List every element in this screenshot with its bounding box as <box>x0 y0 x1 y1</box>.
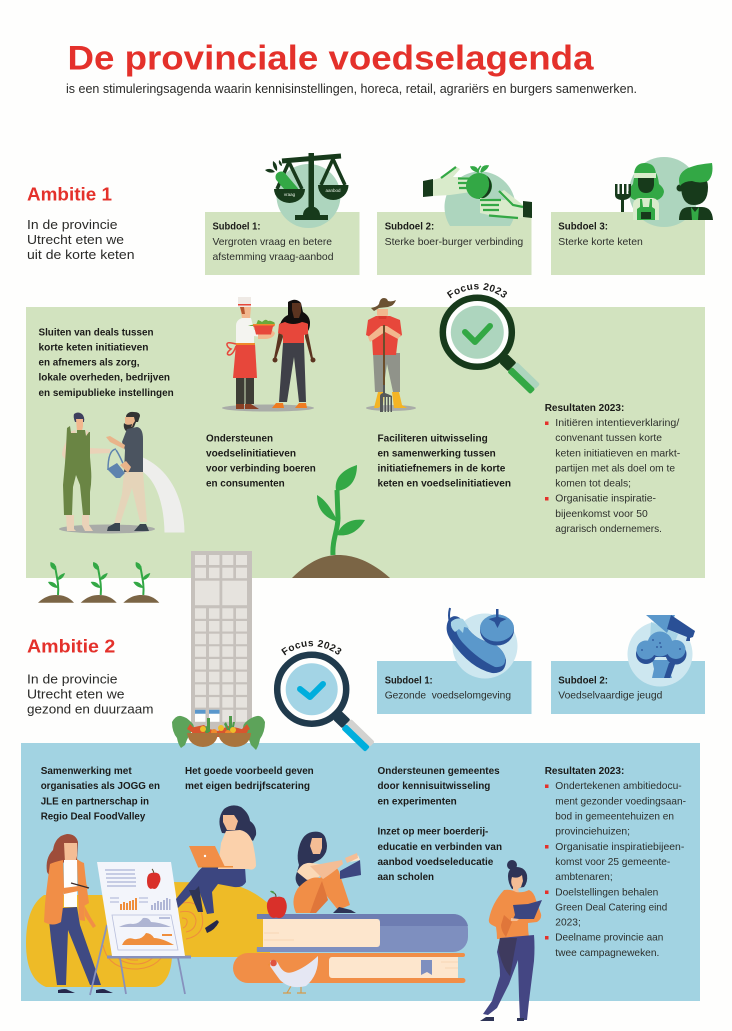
panel: ambitie 2 main <box>21 743 700 1001</box>
illustration: white path <box>143 458 184 532</box>
text: samenwerking <box>41 766 160 822</box>
icon: farmers <box>615 157 713 227</box>
illustration: vegetable baskets <box>172 716 265 750</box>
text: samenwerking: Samenwerking met <box>41 766 132 777</box>
illustration: woman reading <box>293 832 361 913</box>
text: ondersteunen voedselinitiatieven: voor verbinding boeren <box>206 464 316 474</box>
illustration: chicken <box>268 956 318 993</box>
text: sluiten van deals: en afnemers als zorg, <box>38 358 140 368</box>
text: samenwerking: organisaties als JOGG en <box>41 781 160 792</box>
icon: scales <box>265 153 348 228</box>
subdoel box blue 1 <box>377 661 532 714</box>
illustration: presenting woman <box>44 834 113 993</box>
text: faciliteren uitwisseling: initiatiefnemers in de korte <box>378 464 506 474</box>
results ambitie 2 <box>545 766 686 959</box>
subdoel box blue 1: Gezonde voedselomgeving <box>385 690 511 702</box>
illustration: standing woman with book <box>480 860 542 1021</box>
focus magnifier blue: Focus 2023 <box>281 640 342 656</box>
ambitie 1 heading: Ambitie 1 <box>27 184 112 204</box>
text: ondersteunen gemeentes: en experimenten <box>378 796 457 807</box>
text: sluiten van deals: lokale overheden, bedrijven <box>38 373 170 384</box>
focus magnifier green: Focus 2023 <box>446 283 507 298</box>
subdoel box blue 2 <box>551 661 705 714</box>
subdoel box 1: afstemming vraag-aanbod <box>212 252 334 263</box>
illustration: presentation board <box>90 862 191 995</box>
text: ondersteunen gemeentes: door kennisuitwisseling <box>378 781 490 792</box>
illustration: apple on books <box>267 891 287 918</box>
illustration: seedling 2 <box>81 562 117 603</box>
text: het goede voorbeeld <box>185 766 314 792</box>
focus magnifier blue <box>274 640 374 752</box>
ambitie 1 text <box>27 218 135 262</box>
text: ondersteunen voedselinitiatieven: Ondersteunen <box>206 433 273 444</box>
text: ondersteunen gemeentes: aan scholen <box>378 872 434 883</box>
ambitie 2 text: gezond en duurzaam <box>27 702 154 716</box>
text: het goede voorbeeld: Het goede voorbeeld geven <box>185 766 314 777</box>
icon: scales: vraag <box>284 192 296 197</box>
ambitie 2 heading: Ambitie 2 <box>27 636 115 657</box>
text: sluiten van deals: en semipublieke instellingen <box>38 388 174 399</box>
icon: hands with apple <box>423 166 532 226</box>
results ambitie 2: bod in gemeentehuizen en <box>555 811 674 822</box>
results ambitie 1: agrarisch ondernemers. <box>555 524 662 535</box>
text: ondersteunen voedselinitiatieven: voedselinitiatieven <box>206 448 296 459</box>
results ambitie 1: Resultaten 2023: <box>545 403 624 414</box>
ambitie 1 text: Utrecht eten we <box>27 233 124 247</box>
text: ondersteunen voedselinitiatieven: en consumenten <box>206 479 285 490</box>
ambitie 1 text: In de provincie <box>27 218 118 232</box>
illustration: farmer <box>366 298 416 412</box>
subdoel box blue 2: Subdoel 2: <box>558 675 608 686</box>
text: faciliteren uitwisseling: keten en voedselinitiatieven <box>378 479 511 490</box>
focus magnifier green <box>440 283 540 394</box>
icon: broccoli with graduation cap <box>628 615 695 686</box>
panel: ambitie 1 main <box>26 307 705 578</box>
results ambitie 1: komen tot deals; <box>555 479 631 490</box>
text: sluiten van deals: korte keten initiatieven <box>38 342 148 353</box>
icon: scales: aanbod <box>325 188 341 193</box>
subdoel box 2: Subdoel 2: <box>385 222 434 232</box>
illustration: seedling 3 <box>123 562 159 603</box>
subdoel box 3: Subdoel 3: <box>558 222 608 232</box>
subdoel box 2 <box>377 212 532 275</box>
text: sluiten van deals <box>38 327 174 399</box>
results ambitie 1: Initiëren intentieverklaring/ <box>555 418 679 429</box>
subdoel box 1: Subdoel 1: <box>212 222 260 232</box>
results ambitie 1: convenant tussen korte <box>555 433 662 444</box>
results ambitie 2: Ondertekenen ambitiedocu- <box>555 781 682 792</box>
illustration: books <box>233 914 468 983</box>
results ambitie 2: ambtenaren; <box>555 872 613 883</box>
results ambitie 2: Resultaten 2023: <box>545 766 624 777</box>
text: samenwerking: Regio Deal FoodValley <box>41 811 146 822</box>
text: ondersteunen gemeentes: aanbod voedseleducatie <box>378 857 494 868</box>
ambitie 2 text: In de provincie <box>27 672 118 686</box>
illustration: hay bales <box>26 882 270 987</box>
results ambitie 2: komst voor 25 gemeente- <box>555 857 670 868</box>
icon: eggplant and tomato <box>447 608 518 678</box>
title: De provinciale voedselagenda <box>68 40 595 78</box>
illustration: couple with bag <box>59 412 155 534</box>
text: faciliteren uitwisseling: Faciliteren uitwisseling <box>378 433 488 444</box>
text: ondersteunen gemeentes: Ondersteunen gemeentes <box>378 766 500 777</box>
subdoel box blue 2: Voedselvaardige jeugd <box>558 690 663 702</box>
results ambitie 1: partijen met als doel om te <box>555 464 675 474</box>
subdoel box blue 1: Subdoel 1: <box>385 675 433 686</box>
results ambitie 2: 2023; <box>555 918 581 928</box>
illustration: big plant <box>292 465 390 578</box>
text: het goede voorbeeld: met eigen bedrijfscatering <box>185 781 310 792</box>
results ambitie 2: twee campagneweken. <box>555 948 659 959</box>
text: samenwerking: JLE en partnerschap in <box>41 796 149 807</box>
text: faciliteren uitwisseling <box>378 433 511 490</box>
subdoel box 1 <box>205 212 360 275</box>
text: ondersteunen gemeentes: educatie en verbinden van <box>378 842 502 853</box>
illustration: chef and woman <box>222 297 316 412</box>
illustration: seedling 1 <box>38 562 74 603</box>
ambitie 2 text <box>27 672 154 716</box>
results ambitie 2: Deelname provincie aan <box>555 933 663 944</box>
results ambitie 1 <box>545 403 680 535</box>
text: ondersteunen gemeentes: Inzet op meer boerderij- <box>378 827 488 838</box>
results ambitie 2: provinciehuizen; <box>555 827 630 838</box>
illustration: building <box>191 551 252 731</box>
text: sluiten van deals: Sluiten van deals tussen <box>38 327 154 338</box>
subdoel box 2: Sterke boer-burger verbinding <box>385 237 524 248</box>
subdoel box 1: Vergroten vraag en betere <box>212 237 332 248</box>
results ambitie 2: ment gezonder voedingsaan- <box>555 796 686 807</box>
illustration: woman with laptop <box>176 805 256 933</box>
results ambitie 2: Green Deal Catering eind <box>555 902 668 913</box>
results ambitie 1: bijeenkomst voor 50 <box>555 509 648 520</box>
text: faciliteren uitwisseling: en samenwerking tussen <box>378 448 496 459</box>
subdoel box 3 <box>551 212 705 275</box>
text: ondersteunen voedselinitiatieven <box>206 433 316 490</box>
text: ondersteunen gemeentes <box>378 766 502 883</box>
results ambitie 1: Organisatie inspiratie- <box>555 494 656 505</box>
results ambitie 2: Organisatie inspiratiebijeen- <box>555 842 684 853</box>
results ambitie 1: keten initiatieven en markt- <box>555 448 680 459</box>
subdoel box 3: Sterke korte keten <box>558 237 643 248</box>
ambitie 1 text: uit de korte keten <box>27 248 135 262</box>
results ambitie 2: Doelstellingen behalen <box>555 887 658 898</box>
subtitle: is een stimuleringsagenda waarin kennisinstellingen, horeca, retail, agrariërs en burgers samenwerken. <box>66 82 637 96</box>
ambitie 2 text: Utrecht eten we <box>27 687 125 701</box>
